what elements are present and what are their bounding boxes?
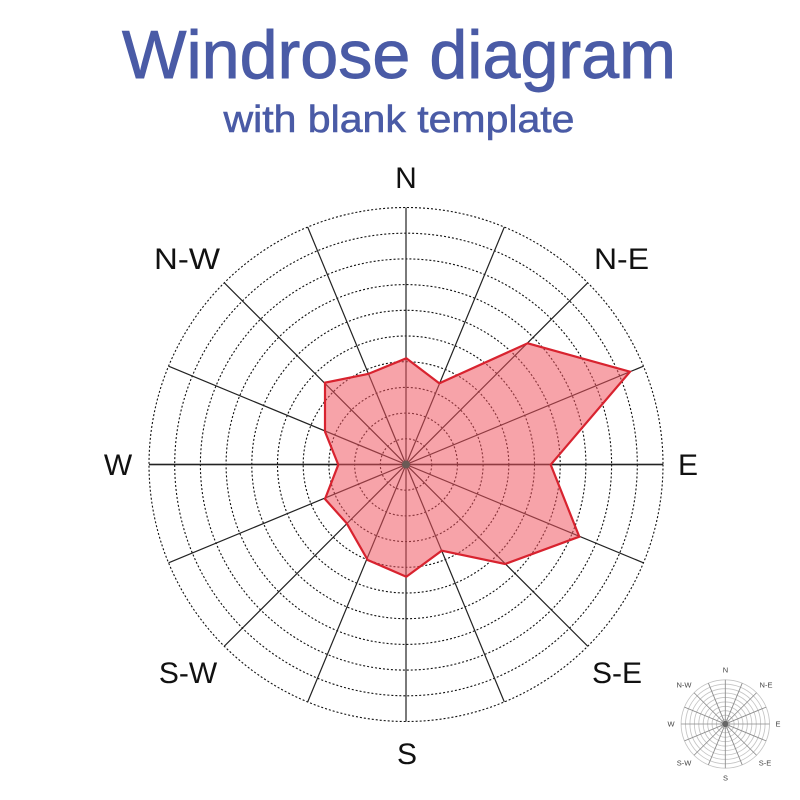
thumbnail labels <box>667 666 781 782</box>
compass labels: N <box>395 162 417 195</box>
compass labels: S-E <box>592 657 642 690</box>
thumbnail labels: E <box>775 720 781 728</box>
compass labels: S-W <box>159 657 218 690</box>
compass labels: S <box>397 738 417 771</box>
thumbnail labels: N-E <box>760 680 772 690</box>
compass labels: N-W <box>154 243 221 276</box>
thumbnail labels: S-W <box>677 758 692 768</box>
thumbnail labels: N <box>723 666 728 674</box>
compass labels: W <box>104 449 133 482</box>
compass labels <box>104 162 698 771</box>
blank template thumbnail <box>667 666 781 782</box>
thumbnail labels: N-W <box>676 680 692 690</box>
thumbnail grid <box>681 680 770 768</box>
thumbnail labels: W <box>667 720 675 728</box>
thumbnail labels: S-E <box>759 758 771 768</box>
thumbnail labels: S <box>723 774 728 782</box>
concentric dotted rings <box>149 208 663 722</box>
direction spokes <box>149 208 663 722</box>
data polygon <box>325 343 630 577</box>
compass labels: E <box>678 449 698 482</box>
subtitle: with blank template <box>222 99 574 141</box>
compass labels: N-E <box>594 243 649 276</box>
windrose chart <box>149 208 663 722</box>
title: Windrose diagram <box>122 17 676 93</box>
centre hub <box>402 460 410 468</box>
